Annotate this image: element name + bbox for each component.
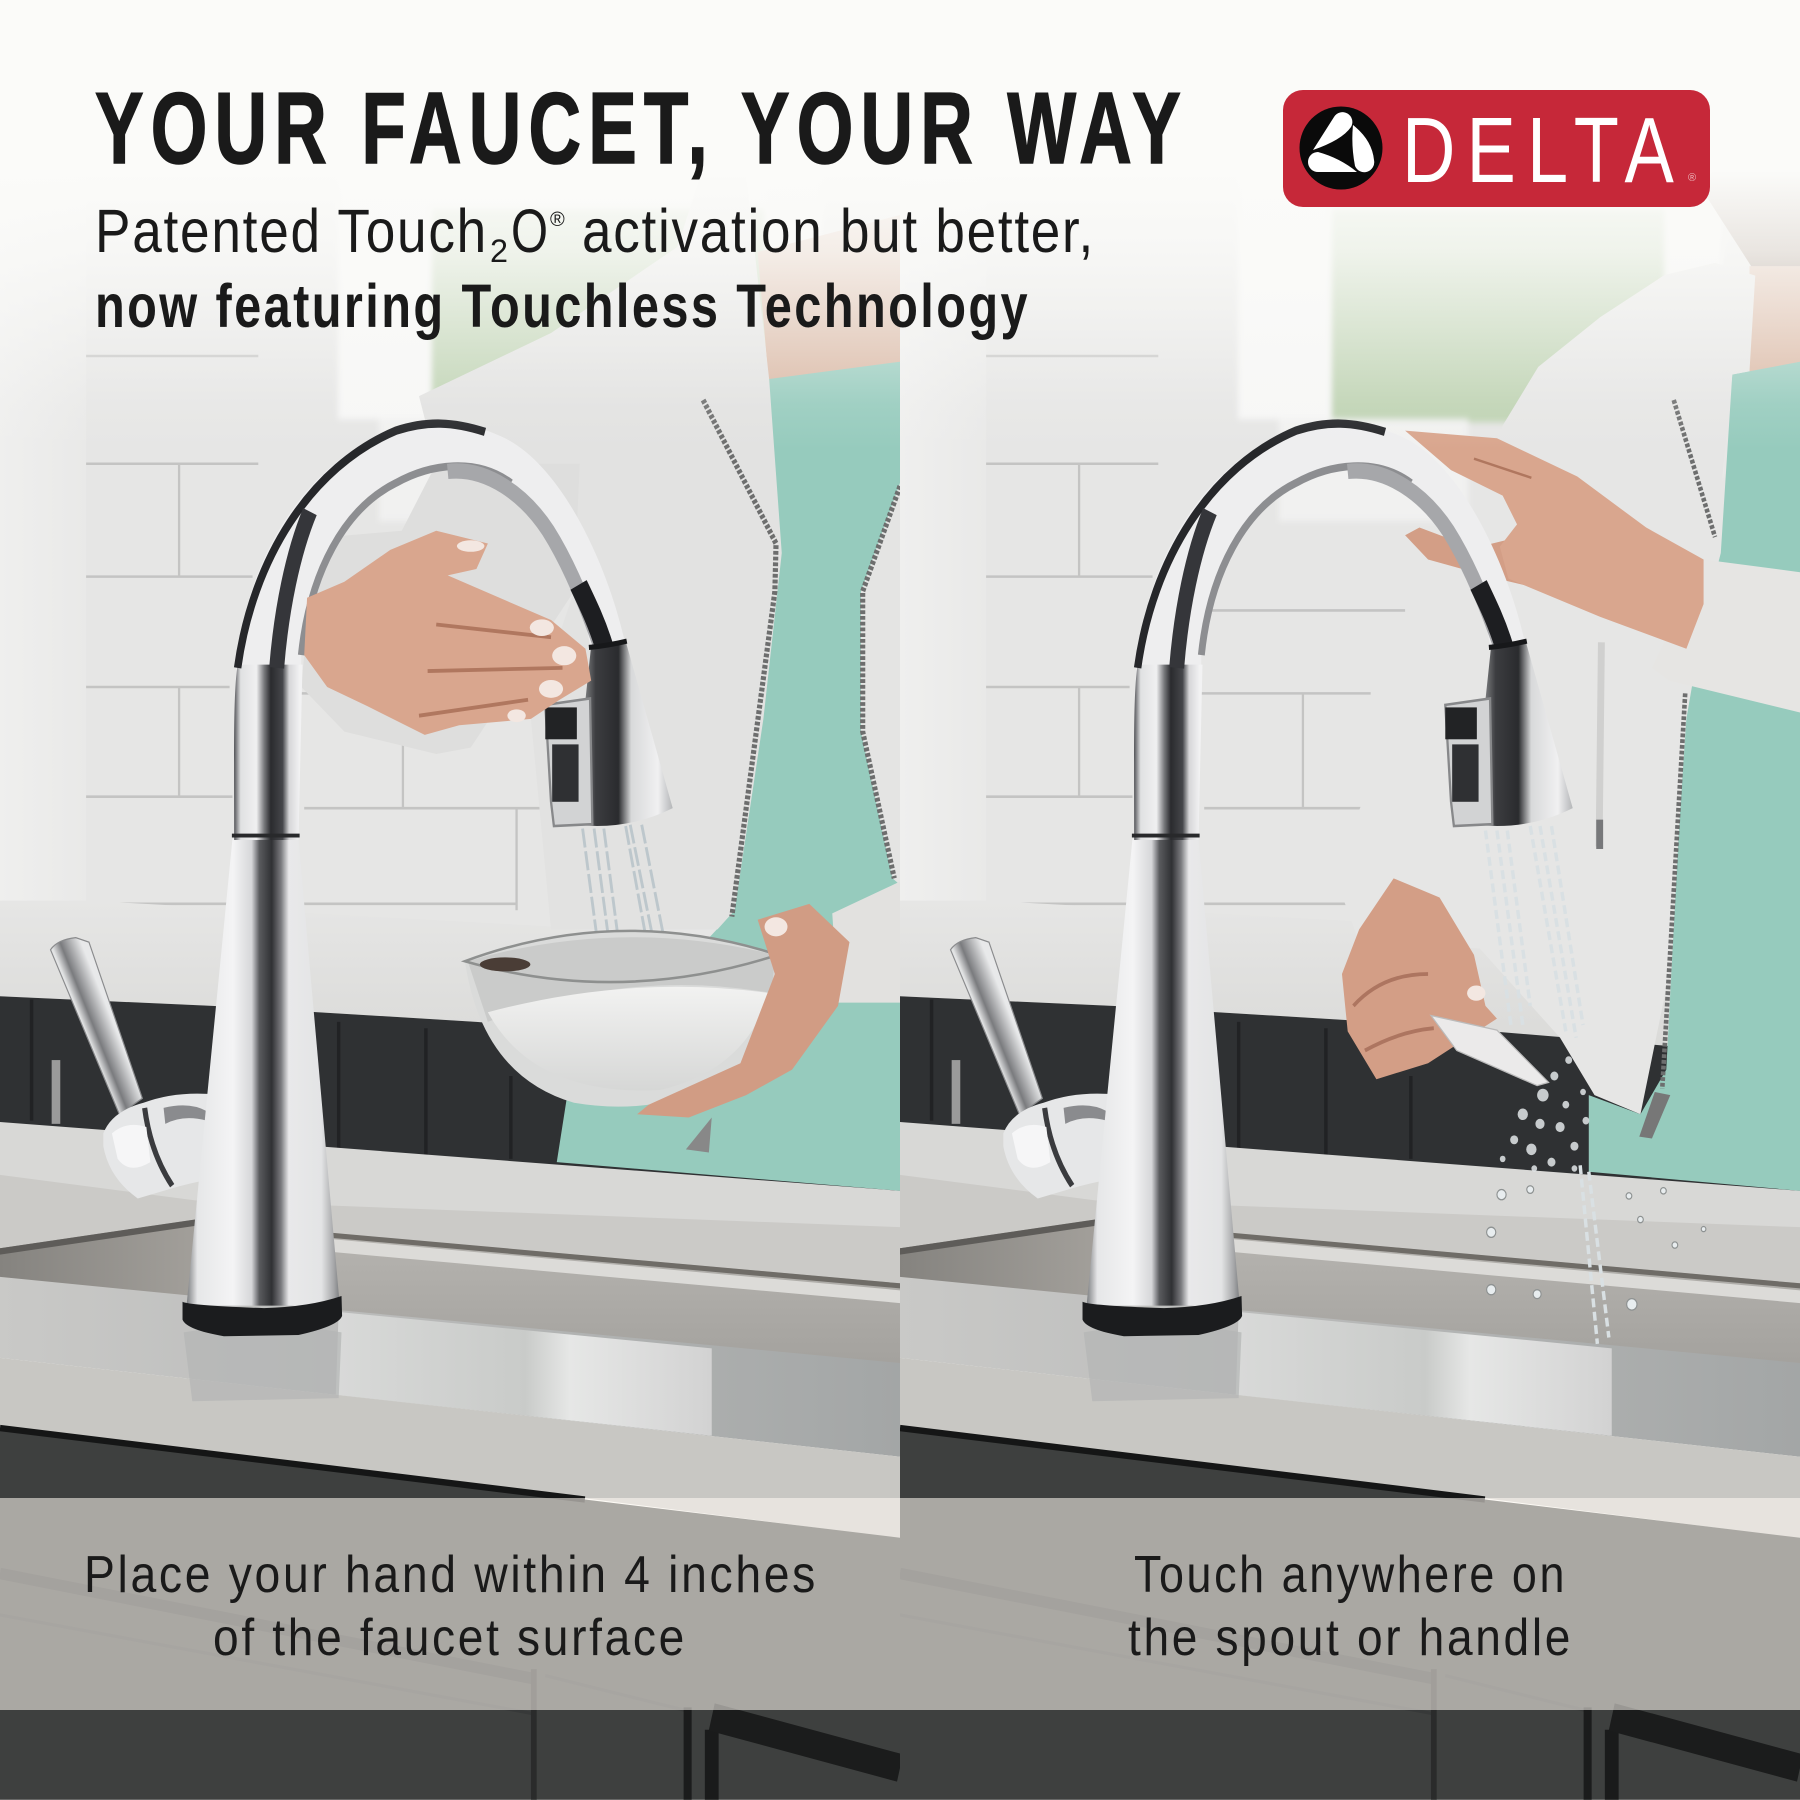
subtitle line one: activation but better, (582, 197, 1095, 265)
faucet right (951, 422, 1573, 1401)
subtitle line one: ® (550, 209, 565, 231)
white card (1431, 1015, 1549, 1086)
water stream right (1485, 826, 1609, 1344)
caption right: the spout or handle (1128, 1609, 1573, 1667)
caption right: Touch anywhere on (1134, 1546, 1567, 1604)
hand near spray head (304, 531, 591, 735)
subtitle line one (95, 197, 1095, 269)
counters and sink left (0, 1122, 900, 1800)
kitchen background left (0, 218, 900, 1191)
panel: right, touch the spout (900, 198, 1800, 1800)
thumb behind spout (1405, 528, 1524, 586)
splash behind card (1500, 1056, 1589, 1172)
top white fade over photo (0, 0, 1800, 450)
caption left: of the faucet surface (213, 1609, 687, 1667)
counters and sink right (900, 1122, 1800, 1800)
subtitle line one: O (511, 197, 548, 265)
logo: Delta (1283, 90, 1710, 207)
caption right (1128, 1546, 1573, 1667)
lower hand holding card (1342, 878, 1497, 1079)
hand touching spout (1405, 431, 1704, 649)
person: hoodie and shirt right (1333, 154, 1800, 1191)
hand holding bowl (637, 904, 849, 1117)
logo: Delta: DELTA (1402, 98, 1685, 202)
caption band (0, 1498, 1800, 1710)
water stream left (581, 824, 664, 931)
faucet left (51, 422, 673, 1401)
glass bowl of milk (465, 931, 778, 1107)
kitchen background right (900, 218, 1800, 1191)
subtitle line two: now featuring Touchless Technology (95, 272, 1030, 340)
water droplets on counter (1487, 1186, 1706, 1310)
title: YOUR FAUCET, YOUR WAY (95, 73, 1188, 185)
logo emblem (1300, 106, 1382, 190)
caption left (84, 1546, 818, 1667)
person: hoodie and shirt left (301, 177, 900, 1191)
logo: Delta: ® (1688, 172, 1696, 184)
panel: left, hover above faucet (0, 216, 900, 1800)
subtitle line one: Patented Touch (95, 197, 488, 265)
subtitle line one: 2 (490, 233, 508, 269)
caption left: Place your hand within 4 inches (84, 1546, 818, 1604)
